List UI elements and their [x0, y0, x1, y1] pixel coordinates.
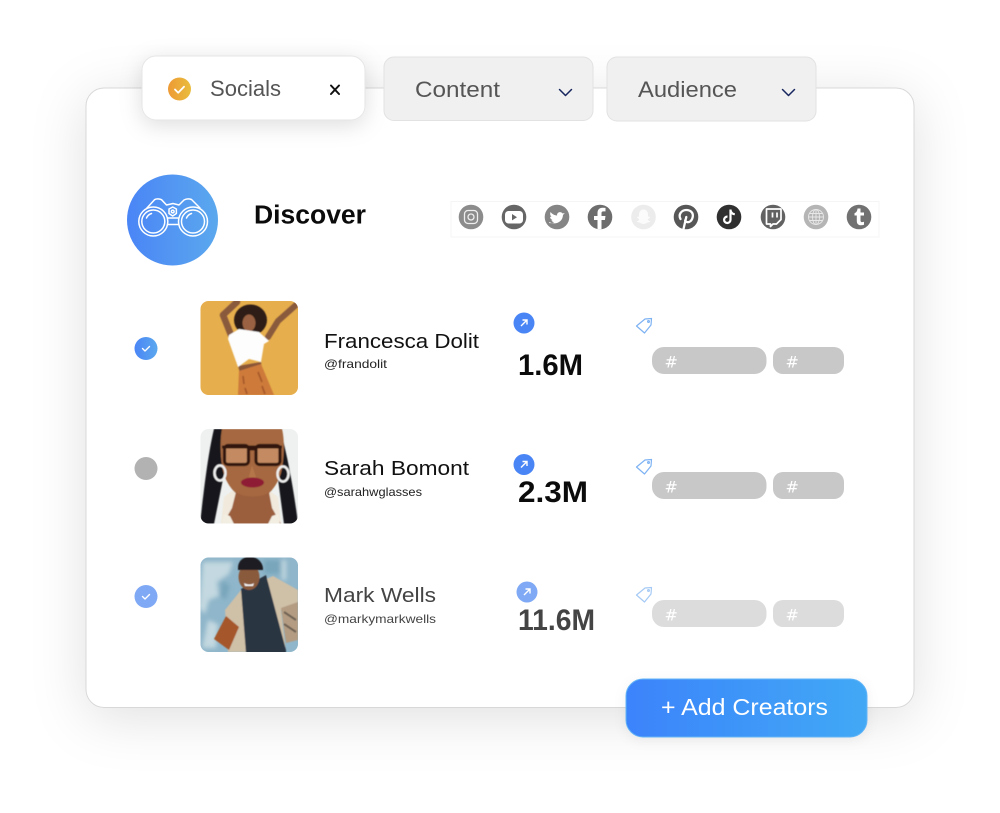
icon: tag [636, 318, 652, 333]
icon: tag [636, 460, 652, 474]
icon: growth arrow [514, 454, 534, 475]
follower count: 2.3M [518, 476, 588, 509]
infographic canvas [70, 52, 930, 745]
hashtag pills [652, 472, 844, 499]
follower count: 11.6M [518, 604, 595, 637]
row: Francesca Dolit [134, 301, 844, 395]
icon: twitter [545, 205, 569, 229]
tab: Content [384, 57, 593, 120]
hashtag pills [652, 347, 844, 374]
icon: pinterest [674, 205, 698, 229]
hashtag pills: # [786, 352, 799, 372]
tab: Audience [607, 57, 816, 121]
photo: Mark [199, 557, 298, 653]
name: Mark Wells [324, 585, 436, 607]
checkbox checked, faded [134, 585, 158, 608]
icon: tumblr [847, 205, 871, 229]
hashtag pills: # [664, 478, 678, 496]
handle: @markymarkwells [324, 612, 436, 626]
photo: Francesca [200, 301, 298, 395]
icon: binoculars [127, 174, 218, 266]
handle: @sarahwglasses [324, 485, 422, 499]
name: Sarah Bomont [324, 458, 469, 480]
hashtag pills: # [664, 606, 678, 624]
icon: instagram [459, 205, 483, 229]
photo: Sarah [200, 429, 298, 524]
hashtag pills: # [664, 352, 678, 372]
icon: growth arrow [514, 312, 534, 334]
hashtag pills: # [786, 478, 799, 496]
icon: tiktok [717, 205, 741, 229]
icon: twitch [761, 205, 785, 229]
heading: Discover: Discover [254, 202, 366, 230]
checkbox unchecked [134, 457, 158, 480]
button: Add Creators [626, 679, 867, 737]
panel: main card [86, 88, 914, 708]
icon: snapchat [631, 205, 656, 229]
follower count: 1.6M [518, 349, 583, 382]
row: Mark Wells [134, 557, 844, 653]
tab: Socials [142, 56, 365, 120]
tab: Socials: Socials [210, 76, 281, 101]
tab: Audience: Audience [638, 77, 737, 102]
icon: growth arrow [516, 582, 538, 602]
row: Sarah Bomont [134, 429, 844, 524]
checkbox checked [134, 337, 158, 360]
handle: @frandolit [324, 357, 388, 371]
icon: facebook [588, 205, 612, 229]
icon: tag [636, 588, 652, 602]
button: Add Creators: + Add Creators [661, 694, 828, 720]
tab: Content: Content [415, 77, 500, 102]
social icons strip [451, 202, 879, 237]
hashtag pills: # [786, 606, 799, 624]
icon: youtube [502, 205, 526, 229]
hashtag pills [652, 600, 844, 627]
icon: website globe [804, 205, 828, 229]
name: Francesca Dolit [324, 331, 479, 353]
